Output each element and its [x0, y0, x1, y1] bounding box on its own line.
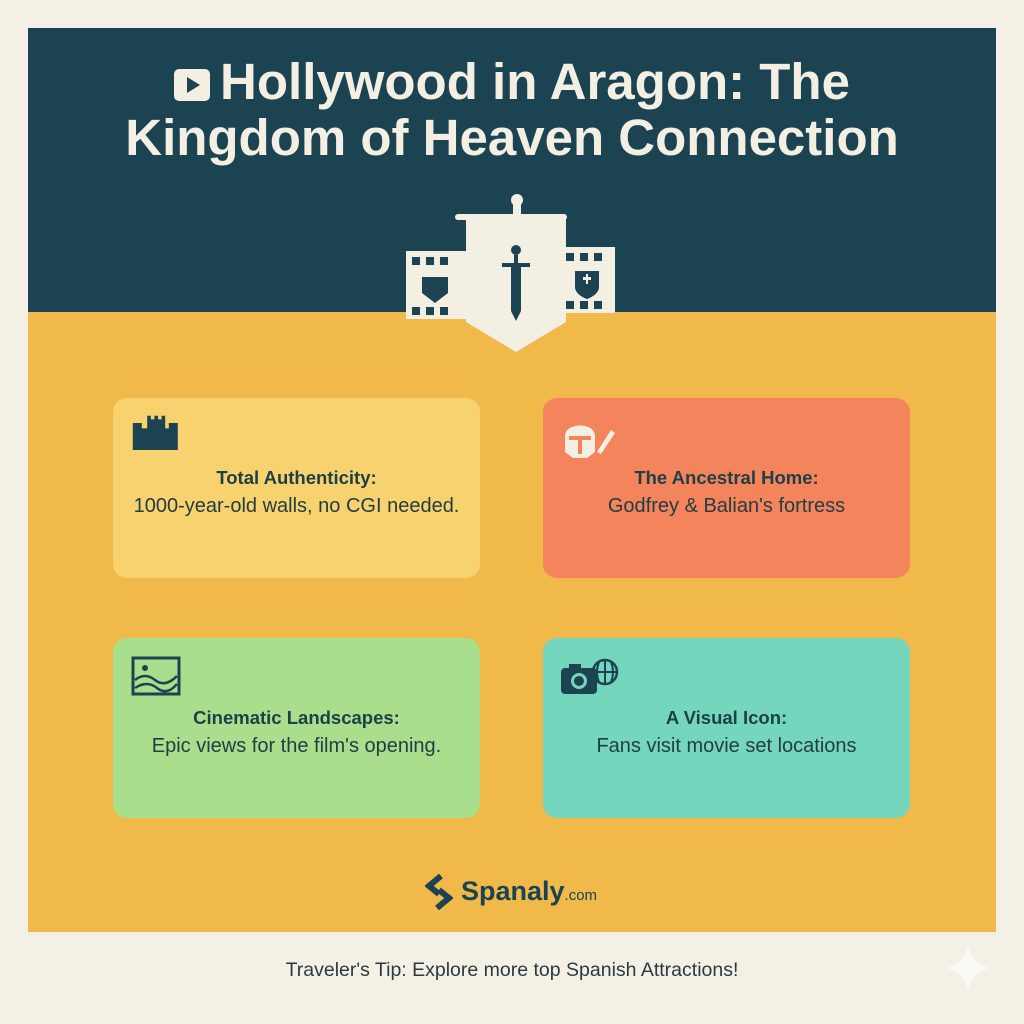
icon: helmet and sword [565, 426, 615, 458]
card: Cinematic Landscapes [113, 638, 480, 818]
card: Total Authenticity: Total Authenticity: [216, 467, 377, 488]
icon: banner with sword and film strips [406, 194, 615, 352]
card: Cinematic Landscapes: Epic views for the film's opening. [152, 735, 441, 757]
card: Cinematic Landscapes: Cinematic Landscapes: [193, 707, 400, 728]
card: A Visual Icon: Fans visit movie set locations [596, 735, 857, 757]
card: A Visual Icon: A Visual Icon: [666, 707, 787, 728]
icon: castle [132, 416, 178, 450]
yellow body panel [28, 312, 996, 932]
card: The Ancestral Home: The Ancestral Home: [634, 467, 819, 488]
title [125, 53, 899, 166]
footer tip: Traveler's Tip: Explore more top Spanish Attractions! [286, 959, 738, 981]
card: Total Authenticity: 1000-year-old walls, no CGI needed. [134, 495, 459, 517]
card: The Ancestral Home [543, 398, 910, 578]
icon: sparkle [947, 947, 989, 989]
header panel [28, 28, 996, 312]
icon: landscape picture [132, 656, 180, 696]
card: The Ancestral Home: Godfrey & Balian's fortress [608, 495, 845, 517]
logo: Spanaly.com: Spanaly.com [461, 876, 597, 906]
logo: Spanaly.com [425, 874, 597, 910]
icon: camera and globe [561, 658, 618, 694]
card: A Visual Icon [543, 638, 910, 818]
card: Total Authenticity [113, 398, 480, 578]
title: Kingdom of Heaven Connection [125, 109, 899, 166]
title: Hollywood in Aragon: The [220, 53, 850, 110]
